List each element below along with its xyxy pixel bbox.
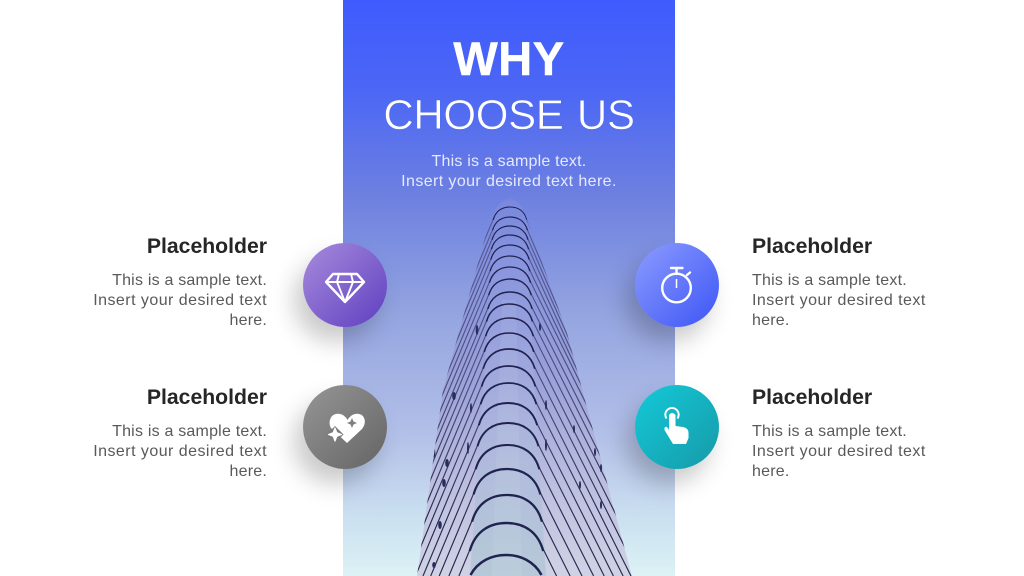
body text xyxy=(752,272,926,329)
text block: top left xyxy=(93,235,267,329)
heading: Placeholder xyxy=(147,235,267,258)
body text: Insert your desired text xyxy=(93,443,267,460)
body text: here. xyxy=(752,463,789,480)
intro text: Insert your desired text here. xyxy=(401,173,617,190)
icon: diamond badge xyxy=(303,243,387,327)
intro text xyxy=(401,153,617,190)
body text xyxy=(93,272,267,329)
body text: Insert your desired text xyxy=(93,292,267,309)
body text: here. xyxy=(752,312,789,329)
text block: bottom left xyxy=(93,386,267,480)
body text: This is a sample text. xyxy=(112,423,267,440)
title: WHY: WHY xyxy=(453,32,565,85)
body text xyxy=(93,423,267,480)
body text: Insert your desired text xyxy=(752,292,926,309)
body text: here. xyxy=(230,312,267,329)
body text: This is a sample text. xyxy=(752,423,907,440)
illustration: glass skyscraper xyxy=(417,200,632,576)
text block: top right xyxy=(752,235,926,329)
panel: central gradient column with building xyxy=(343,0,675,576)
icon: touch badge xyxy=(634,385,718,469)
intro text: This is a sample text. xyxy=(432,153,586,170)
heading: Placeholder xyxy=(147,386,267,409)
icon: heart badge xyxy=(303,385,387,469)
body text: This is a sample text. xyxy=(112,272,267,289)
heading: Placeholder xyxy=(752,235,872,258)
body text: This is a sample text. xyxy=(752,272,907,289)
icon: stopwatch badge xyxy=(634,243,718,327)
heading: Placeholder xyxy=(752,386,872,409)
body text: here. xyxy=(230,463,267,480)
body text xyxy=(752,423,926,480)
body text: Insert your desired text xyxy=(752,443,926,460)
title: CHOOSE US: CHOOSE US xyxy=(383,91,635,138)
text block: bottom right xyxy=(752,386,926,480)
